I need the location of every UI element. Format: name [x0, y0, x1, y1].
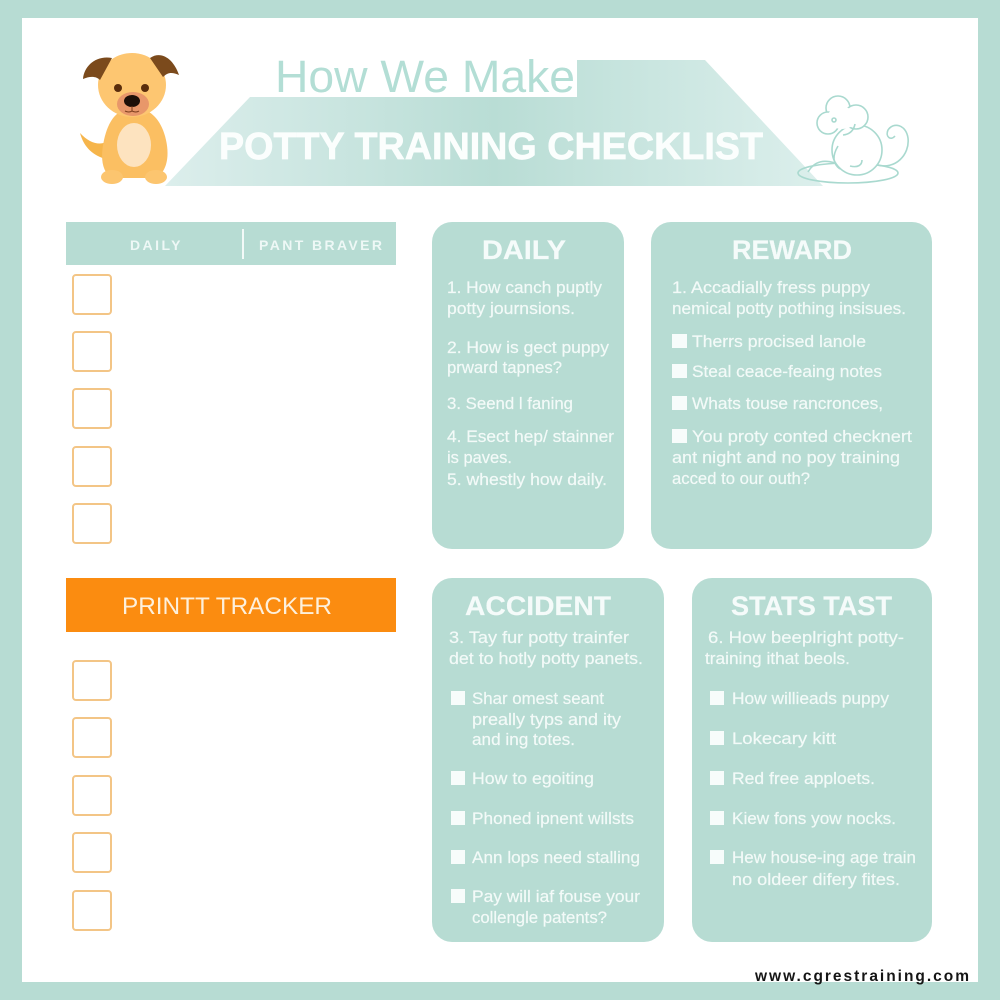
panel: accident: Shar omest seant: [472, 690, 604, 708]
panel: reward: REWARD: [732, 235, 852, 265]
panel: stats tast: no oldeer difery fites.: [732, 871, 900, 889]
panel: accident: [432, 578, 664, 942]
left table header: [66, 222, 396, 265]
panel: accident: det to hotly potty panets.: [449, 650, 643, 668]
title: Potty Training Checklist: POTTY TRAINING CHECKLIST: [219, 126, 763, 168]
panel: accident: Ann lops need stalling: [472, 849, 640, 867]
panel: reward: Steal ceace-feaing notes: [692, 363, 882, 381]
panel: stats tast: Lokecary kitt: [732, 730, 836, 748]
panel: daily: 4. Esect hep/ stainner: [447, 428, 615, 446]
panel: stats tast: 6. How beeplright potty-: [708, 629, 904, 647]
panel: stats tast: [692, 578, 932, 942]
left table header: PANT BRAVER: [259, 237, 382, 253]
panel: daily: 1. How canch puptly: [447, 279, 603, 297]
panel: accident: 3. Tay fur potty trainfer: [449, 629, 630, 647]
title: How We Make: How We Make: [275, 51, 575, 102]
panel: stats tast: training ithat beols.: [705, 650, 850, 668]
panel: daily: 5. whestly how daily.: [447, 471, 607, 489]
orange tracker bar: [66, 578, 396, 632]
checkbox column 2: [73, 661, 111, 930]
panel: stats tast: STATS TAST: [731, 591, 893, 621]
panel: daily: is paves.: [447, 449, 512, 467]
left table header: DAILY: [130, 237, 181, 253]
panel: reward: ant night and no poy training: [672, 449, 900, 467]
icon: mouse outline: [798, 96, 908, 183]
panel: reward: nemical potty pothing insisues.: [672, 300, 906, 318]
panel: reward: 1. Accadially fress puppy: [672, 279, 871, 297]
checkbox column 1: [73, 275, 111, 543]
panel: stats tast: Kiew fons yow nocks.: [732, 810, 896, 828]
panel: reward: [651, 222, 932, 549]
panel: accident: collengle patents?: [472, 909, 607, 927]
panel: accident: and ing totes.: [472, 731, 575, 749]
panel: stats tast: Red free apploets.: [732, 770, 875, 788]
panel: daily: DAILY: [482, 235, 566, 265]
panel: daily: 3. Seend l faning: [447, 395, 573, 413]
panel: reward: You proty conted checknert: [692, 428, 912, 446]
header banner: [165, 60, 823, 186]
orange tracker bar: PRINTT TRACKER: [122, 593, 332, 620]
panel: stats tast: Hew house-ing age train: [732, 849, 916, 867]
panel: accident: Phoned ipnent willsts: [472, 810, 634, 828]
panel: accident: ACCIDENT: [465, 591, 612, 621]
panel: accident: preally typs and ity: [472, 711, 622, 729]
website footer: www.cgrestraining.com: [754, 968, 969, 985]
panel: accident: Pay will iaf fouse your: [472, 888, 641, 906]
panel: reward: Therrs procised lanole: [692, 333, 866, 351]
panel: daily: prward tapnes?: [447, 359, 562, 377]
icon: puppy: [80, 53, 179, 184]
panel: stats tast: How willieads puppy: [732, 690, 890, 708]
panel: reward: acced to our outh?: [672, 470, 810, 488]
panel: daily: [432, 222, 624, 549]
panel: accident: How to egoiting: [472, 770, 594, 788]
panel: daily: 2. How is gect puppy: [447, 339, 610, 357]
panel: daily: potty journsions.: [447, 300, 575, 318]
panel: reward: Whats touse rancronces,: [692, 395, 883, 413]
